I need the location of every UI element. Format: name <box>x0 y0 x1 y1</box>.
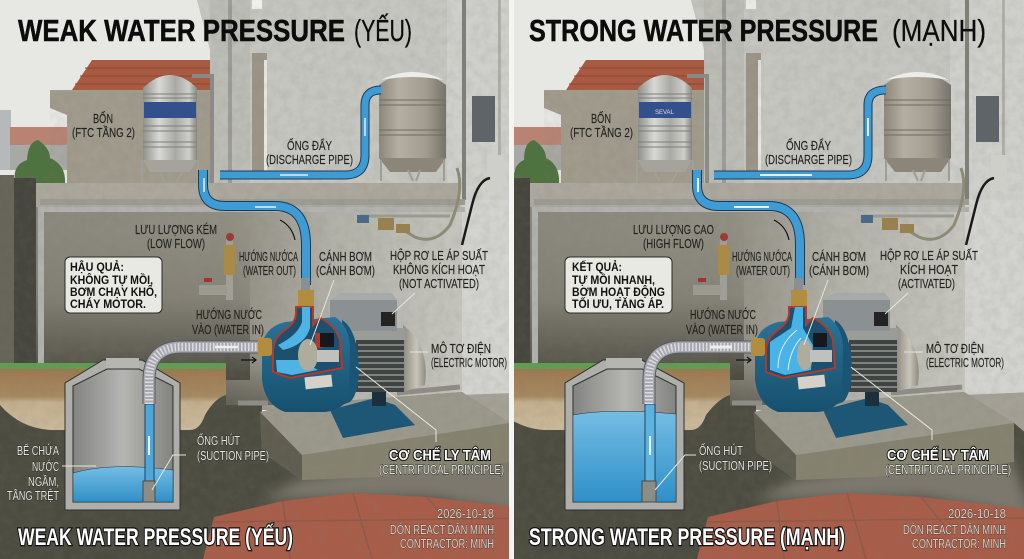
label: water out: (WATER OUT) <box>736 264 790 278</box>
label: water out <box>239 249 298 278</box>
footer credit <box>903 507 1006 551</box>
footer credit: 2026-10-18 <box>437 507 494 521</box>
title: WEAK WATER PRESSURE <box>18 13 345 48</box>
panel: strong water pressure <box>494 0 1024 559</box>
title qualifier: (MẠNH) <box>892 13 986 48</box>
label: high flow: (HIGH FLOW) <box>643 237 704 251</box>
callout: results: BƠM HOẠT ĐỘNG <box>572 286 665 299</box>
suction pipe and hose <box>143 347 262 502</box>
panel: weak water pressure <box>0 0 542 559</box>
callout: consequences: KHÔNG TỰ MỒI, <box>70 274 153 287</box>
label: centrifugal principle: (CENTRIFUGAL PRINCIPLE) <box>379 463 504 477</box>
label: tank <box>570 111 633 140</box>
label: discharge pipe: ỐNG ĐẨY <box>786 138 832 153</box>
title qualifier: (YẾU) <box>354 13 412 48</box>
suction pipe and hose <box>642 347 762 502</box>
callout: consequences: HẬU QUẢ: <box>70 261 124 274</box>
label: suction pipe: ỐNG HÚT <box>197 433 240 448</box>
background scene: houses, wall and ground <box>0 0 542 559</box>
label: high flow: LƯU LƯỢNG CAO <box>633 223 714 237</box>
arrow: water in <box>736 357 751 363</box>
label: water out: HƯỚNG NƯỚCA <box>732 249 792 264</box>
label: underground tank: NƯỚC <box>32 459 59 474</box>
label: water out: (WATER OUT) <box>243 264 296 278</box>
label: low flow: (LOW FLOW) <box>147 237 205 251</box>
upper delivery pipe <box>203 170 306 285</box>
title: STRONG WATER PRESSURE <box>529 13 878 48</box>
background scene: houses, wall and ground <box>494 0 1024 559</box>
label: pressure relay box: HỘP RƠ LE ÁP SUẤT <box>390 248 488 263</box>
label: tank: (FTC TẦNG 2) <box>570 125 633 140</box>
label: electric motor: (ELECTRIC MOTOR) <box>431 356 507 370</box>
label: impeller: (CÁNH BƠM) <box>809 263 869 278</box>
label: low flow <box>135 222 217 251</box>
pump <box>751 278 919 438</box>
label: tank: BỐN <box>93 111 113 126</box>
label: electric motor <box>926 341 1004 370</box>
label: discharge pipe: (DISCHARGE PIPE) <box>765 153 852 167</box>
icon: pressure box and wiring <box>357 96 503 245</box>
water level low <box>73 467 173 502</box>
icon: pressure tank <box>379 72 446 181</box>
callout: results: TỰ MỒI NHANH, <box>572 274 655 287</box>
icon: roof tank <box>142 75 212 183</box>
label: water in <box>192 307 264 337</box>
callout: results: TỐI ƯU, TĂNG ÁP. <box>572 297 664 311</box>
label: pressure relay box: KÍCH HOẠT <box>900 262 958 277</box>
footer title: STRONG WATER PRESSURE (MẠNH) <box>529 524 845 551</box>
wall and ground texture <box>515 0 1024 430</box>
label: impeller <box>316 249 375 278</box>
label: underground tank: NGẦM, <box>28 474 59 489</box>
label: centrifugal principle <box>885 446 1011 477</box>
upper delivery pipe <box>697 170 800 285</box>
label: pressure relay box: (NOT ACTIVATED) <box>399 277 479 291</box>
icon: roof tank <box>637 75 707 183</box>
label: centrifugal principle: CƠ CHẾ LY TÂM <box>887 446 989 464</box>
label: water in: VÀO (WATER IN) <box>192 322 264 337</box>
label: tank: (FTC TẦNG 2) <box>72 125 135 140</box>
wall and ground texture <box>14 0 509 428</box>
label: electric motor: MÔ TƠ ĐIỆN <box>431 341 491 356</box>
callout: results: KẾT QUẢ: <box>572 261 622 274</box>
label: electric motor: MÔ TƠ ĐIỆN <box>926 341 984 356</box>
icon: pressure box and wiring <box>861 96 1007 245</box>
icon: wall valves <box>693 233 729 300</box>
label: suction pipe: (SUCTION PIPE) <box>197 449 269 463</box>
label: centrifugal principle <box>379 446 504 477</box>
footer title: WEAK WATER PRESSURE (YẾU) <box>18 523 293 551</box>
label: water in: HƯỚNG NƯỚC <box>690 307 756 322</box>
label: discharge pipe <box>765 138 852 167</box>
label: suction pipe <box>197 433 269 463</box>
label: water out: HƯỚNG NƯỚCA <box>239 249 298 264</box>
pump <box>258 278 426 438</box>
label: discharge pipe: ỐNG ĐẨY <box>287 138 333 153</box>
footer credit <box>390 507 494 551</box>
label: tank <box>72 111 135 140</box>
label: pressure relay box: HỘP RƠ LE ÁP SUẤT <box>880 248 978 263</box>
callout: consequences: CHÁY MOTOR. <box>70 298 146 311</box>
icon: pressure tank <box>884 72 951 181</box>
label: impeller <box>809 249 869 278</box>
leader lines <box>655 280 932 490</box>
label: underground tank: BỂ CHỨA <box>17 443 59 458</box>
icon: roof tank: SEVAL <box>655 110 675 116</box>
callout: consequences <box>65 257 162 313</box>
label: impeller: (CÁNH BƠM) <box>316 263 375 278</box>
label: suction pipe: ỐNG HÚT <box>699 443 743 458</box>
label: impeller: CÁNH BƠM <box>812 249 866 264</box>
footer credit: CONTRACTOR: MINH <box>400 537 494 551</box>
label: discharge pipe <box>266 138 353 167</box>
label: tank: BỐN <box>591 111 611 126</box>
label: discharge pipe: (DISCHARGE PIPE) <box>266 153 353 167</box>
footer credit: 2026-10-18 <box>948 507 1006 521</box>
label: suction pipe: (SUCTION PIPE) <box>699 459 772 473</box>
label: high flow <box>633 223 714 251</box>
label: low flow: LƯU LƯỢNG KÉM <box>135 222 217 237</box>
label: pressure relay box <box>390 248 488 291</box>
label: water in: VÀO (WATER IN) <box>686 322 758 337</box>
label: water in <box>686 307 758 337</box>
label: underground tank: TẦNG TRỆT <box>7 488 59 503</box>
label: impeller: CÁNH BƠM <box>319 249 372 264</box>
water level high <box>573 411 676 502</box>
label: electric motor <box>431 341 507 370</box>
footer credit: DÒN REACT DÂN MINH <box>390 522 494 537</box>
label: pressure relay box: KHÔNG KÍCH HOẠT <box>393 262 485 277</box>
label: pressure relay box <box>880 248 978 291</box>
callout: results <box>565 257 672 313</box>
label: water in: HƯỚNG NƯỚC <box>196 307 262 322</box>
label: suction pipe <box>699 443 772 473</box>
underground tank <box>565 358 684 510</box>
discharge pipe <box>714 90 886 175</box>
callout: consequences: BƠM CHẠY KHÔ, <box>70 286 157 299</box>
label: pressure relay box: (ACTIVATED) <box>898 277 955 291</box>
label: water out <box>732 249 792 278</box>
label: underground tank <box>7 443 59 503</box>
underground tank <box>65 358 180 510</box>
arrow: water in <box>241 357 256 363</box>
label: centrifugal principle: CƠ CHẾ LY TÂM <box>389 446 491 464</box>
icon: wall valves <box>199 233 235 300</box>
leader lines <box>62 280 436 490</box>
discharge pipe <box>220 90 381 175</box>
